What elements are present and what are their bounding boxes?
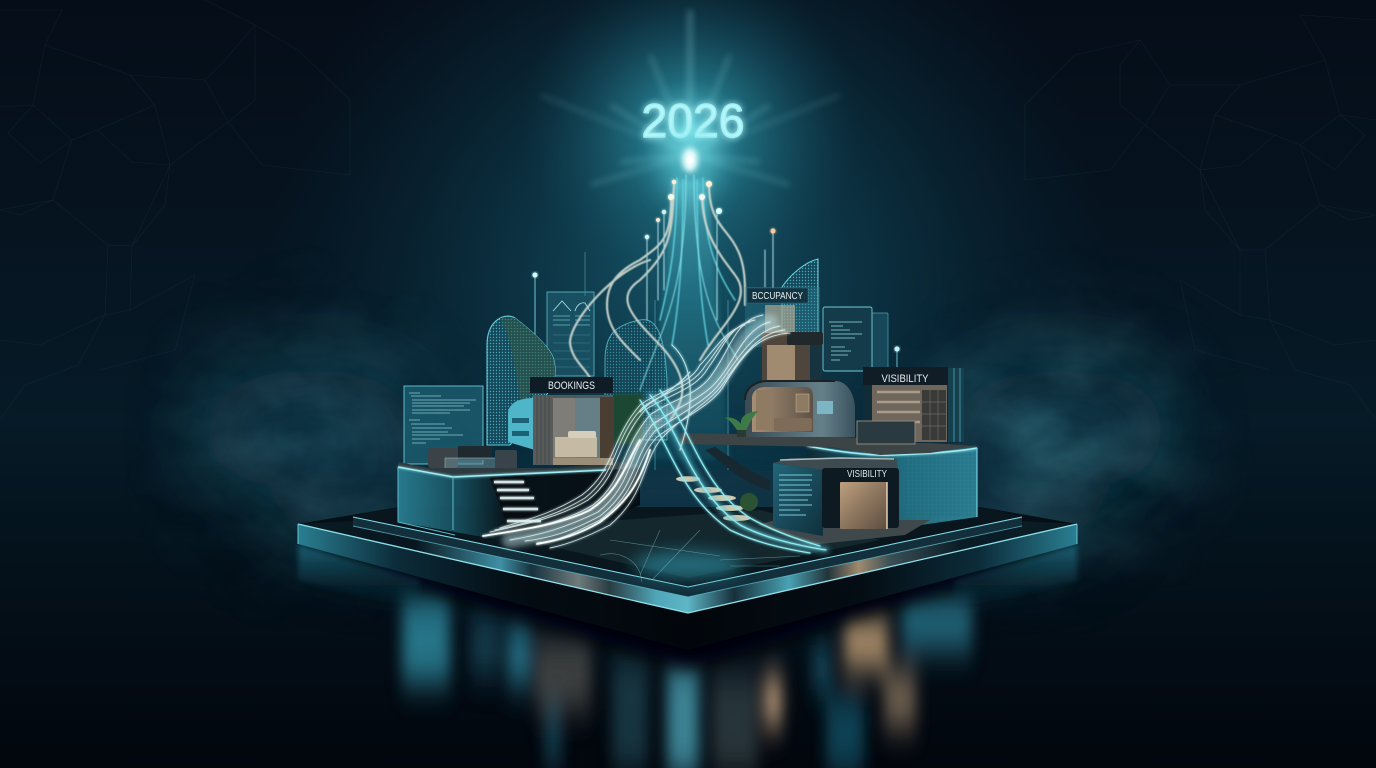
under-slab glow	[298, 545, 420, 610]
mesh dome left	[487, 316, 555, 445]
cream wires	[570, 184, 745, 420]
central glass column	[650, 180, 730, 470]
flowing light streams	[483, 315, 826, 553]
platform shadow	[300, 552, 1076, 668]
light source star	[662, 127, 718, 203]
pod room	[745, 381, 855, 437]
bookings sign: BOOKINGS	[548, 380, 595, 392]
staircase	[490, 476, 545, 532]
title: 2026: 2026	[642, 94, 744, 147]
back panel with glyphs	[532, 252, 594, 376]
dark curved stair	[705, 447, 770, 490]
inner plate	[298, 507, 1077, 596]
visibility sign front: VISIBILITY	[847, 469, 887, 480]
left furniture lounge	[428, 446, 517, 472]
potted plant	[724, 411, 758, 437]
central light rays	[540, 10, 840, 185]
glass box right	[807, 446, 977, 528]
lower plant	[740, 493, 758, 511]
wires rising to the 2026 light	[570, 165, 773, 560]
back document panels	[823, 307, 900, 371]
lower visibility kiosk	[758, 458, 930, 545]
stream haze	[510, 322, 826, 550]
glass box left	[398, 462, 640, 540]
mesh column center	[605, 320, 667, 440]
occupancy sign: BCCUPANCY	[752, 291, 803, 302]
visibility sign back: VISIBILITY	[882, 373, 929, 385]
bookings pavilion	[508, 377, 643, 465]
platform slab	[298, 507, 1077, 650]
stepping stones	[676, 476, 751, 521]
back visibility shop	[857, 367, 964, 444]
base	[758, 520, 930, 545]
upper floor slab right	[680, 433, 975, 455]
low-poly mesh pattern	[0, 0, 1376, 420]
left document panel	[404, 386, 483, 464]
wire tip lights	[645, 180, 776, 239]
reflection on floor	[402, 598, 972, 768]
plant wall	[613, 394, 643, 444]
occupancy dome and glass backdrop	[745, 259, 820, 347]
occupancy sign	[747, 288, 808, 303]
occupancy tower	[762, 305, 823, 387]
floor circuit lines	[600, 530, 800, 582]
